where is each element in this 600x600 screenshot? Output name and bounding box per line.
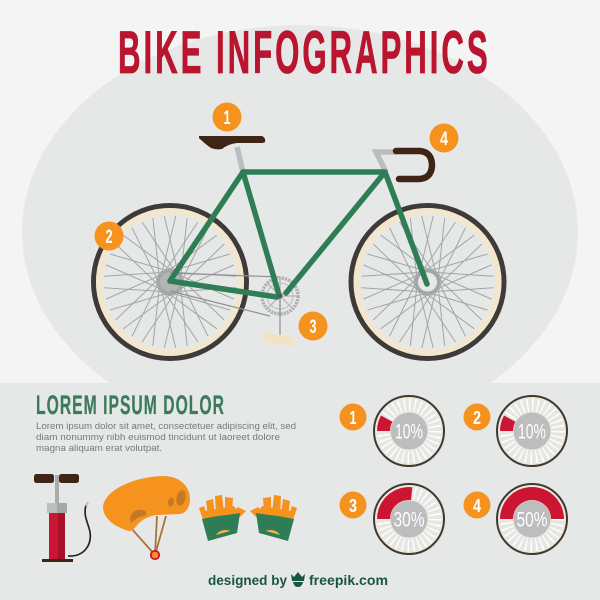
handlebar bbox=[396, 151, 432, 179]
rear cog bbox=[160, 272, 180, 292]
gauge 3: 30% bbox=[374, 484, 444, 554]
icon: right glove bbox=[250, 495, 297, 541]
rear wheel bbox=[85, 195, 255, 369]
badge 3: gauge: 3 bbox=[349, 496, 357, 516]
gauge 1: 10% bbox=[374, 396, 444, 466]
body text: diam nonummy nibh euismod tincidunt ut laoreet dolore bbox=[36, 432, 280, 442]
badge 4: gauge: 4 bbox=[473, 496, 481, 516]
badge 2: gauge: 2 bbox=[473, 408, 481, 428]
gauge 2: 10%: 10% bbox=[518, 420, 546, 444]
badge 2: gauge bbox=[464, 404, 490, 430]
badge 4: handlebar bbox=[430, 124, 458, 152]
bicycle illustration bbox=[85, 136, 512, 369]
footer credit bbox=[208, 572, 388, 588]
icon: left glove bbox=[199, 495, 246, 541]
badge 1: gauge bbox=[340, 404, 366, 430]
badge 4: handlebar: 4 bbox=[440, 129, 448, 150]
bottom panel bbox=[0, 383, 600, 600]
gauge 3: 30%: 30% bbox=[394, 508, 424, 532]
badge 3: pedals: 3 bbox=[310, 317, 316, 338]
badge 3: gauge bbox=[340, 492, 366, 518]
badge 1: gauge: 1 bbox=[350, 408, 356, 428]
gauge 4: 50% bbox=[497, 484, 567, 554]
chain bbox=[170, 273, 280, 316]
chainring bbox=[262, 278, 298, 314]
crank and pedal bbox=[265, 296, 294, 346]
badge 1: saddle bbox=[212, 102, 242, 132]
saddle bbox=[199, 136, 265, 149]
badge 1: saddle: 1 bbox=[224, 108, 231, 129]
body text: Lorem ipsum dolor sit amet, consectetuer adipiscing elit, sed bbox=[36, 421, 296, 431]
badge 4: gauge bbox=[464, 492, 490, 518]
footer credit: freepik.com bbox=[309, 572, 388, 588]
footer credit: designed by bbox=[208, 572, 287, 588]
backdrop ellipse bbox=[22, 25, 578, 439]
icon: bike pump bbox=[34, 474, 90, 562]
seat post bbox=[237, 147, 243, 172]
section heading: LOREM IPSUM DOLOR bbox=[36, 390, 224, 420]
gauge 1: 10%: 10% bbox=[395, 420, 423, 444]
title: BIKE INFOGRAPHICS bbox=[118, 20, 488, 87]
gauge 4: 50%: 50% bbox=[517, 508, 547, 532]
gauge 2: 10% bbox=[497, 396, 567, 466]
stem bbox=[376, 152, 396, 172]
body text: magna aliquam erat volutpat. bbox=[36, 443, 162, 453]
badge 2: wheel: 2 bbox=[106, 227, 112, 248]
front wheel bbox=[343, 195, 512, 369]
badge 3: pedals bbox=[298, 312, 328, 340]
badge 2: wheel bbox=[94, 222, 124, 250]
body text bbox=[36, 421, 296, 453]
bottom bracket bbox=[278, 294, 282, 298]
icon: helmet bbox=[103, 476, 190, 559]
frame bbox=[170, 172, 427, 297]
